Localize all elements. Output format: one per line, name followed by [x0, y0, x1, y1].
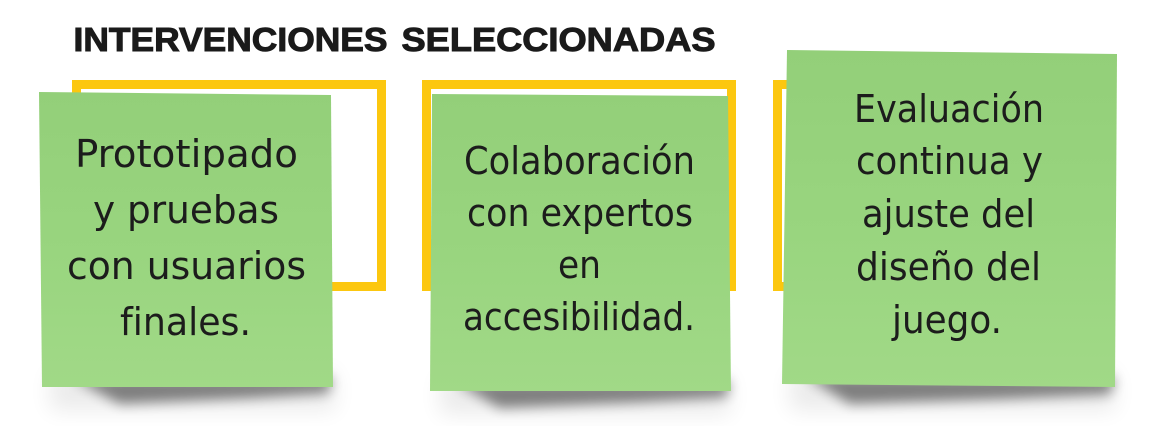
- note text: con expertos: [467, 191, 693, 235]
- title: [74, 22, 716, 59]
- note text: [67, 132, 306, 344]
- note text: y pruebas: [93, 188, 279, 232]
- note text: [854, 87, 1044, 342]
- title: INTERVENCIONES: [74, 22, 388, 59]
- yellow frame: [76, 84, 382, 286]
- note text: Colaboración: [464, 139, 695, 183]
- note text: diseño del: [856, 245, 1041, 289]
- green sticky note: [782, 50, 1117, 387]
- note text: juego.: [891, 298, 1002, 342]
- note text: ajuste del: [862, 192, 1035, 236]
- note text: [463, 139, 695, 339]
- note text: finales.: [120, 300, 251, 344]
- panel: colaboracion: [426, 84, 732, 414]
- title: SELECCIONADAS: [402, 22, 716, 59]
- note text: con usuarios: [67, 244, 306, 288]
- note shadow: [50, 372, 335, 410]
- note text: Prototipado: [75, 132, 298, 176]
- green sticky note: [430, 94, 731, 391]
- note shadow: [440, 376, 730, 414]
- panel: prototipado: [39, 84, 382, 410]
- panel: evaluacion: [778, 50, 1117, 410]
- note text: Evaluación: [854, 87, 1044, 131]
- yellow frame: [426, 84, 732, 286]
- note shadow: [790, 372, 1115, 410]
- note text: continua y: [856, 139, 1043, 183]
- green sticky note: [39, 92, 333, 387]
- note text: accesibilidad.: [463, 295, 695, 339]
- yellow frame: [778, 84, 1082, 286]
- note text: en: [558, 243, 601, 287]
